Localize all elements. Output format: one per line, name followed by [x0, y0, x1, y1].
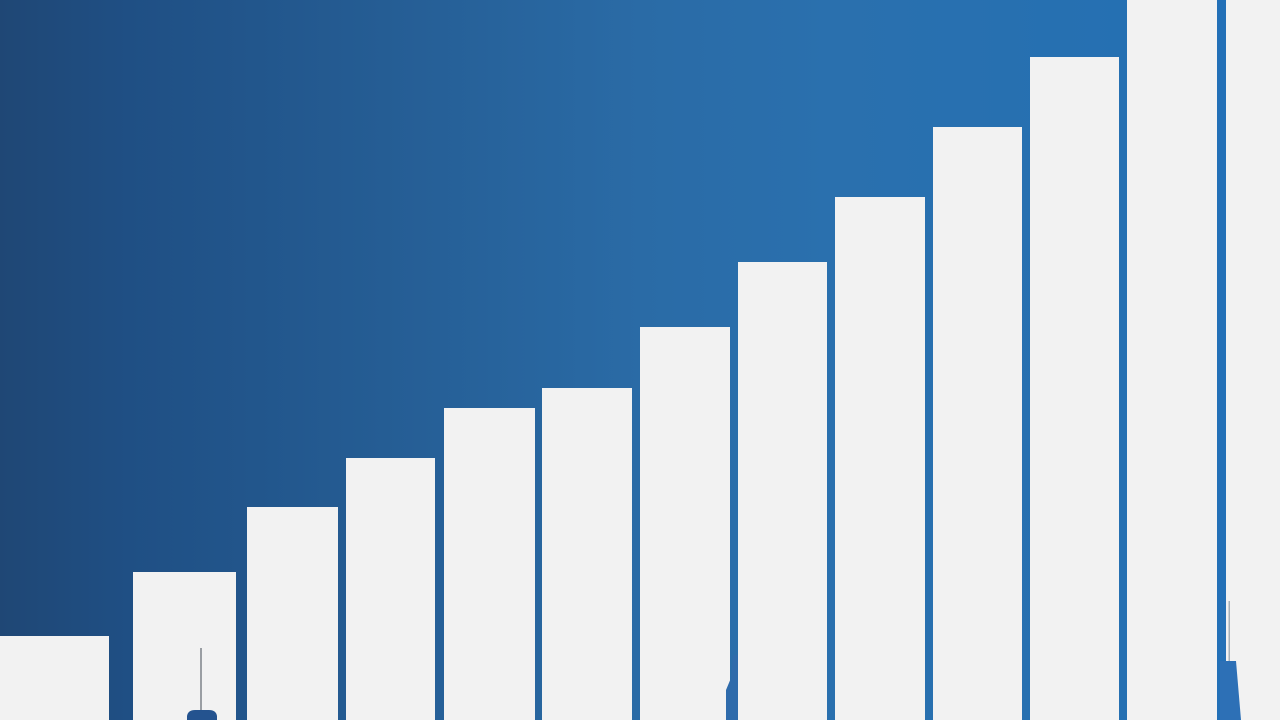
bar 10: [933, 127, 1022, 720]
icon: antenna tower on right bars: [1220, 601, 1241, 720]
bar 13: [1226, 0, 1280, 720]
bar 8: [738, 262, 827, 720]
bar 9: [835, 197, 925, 720]
bar 2: [133, 572, 236, 720]
bar 6: [542, 388, 632, 720]
bar 4: [346, 458, 435, 720]
bar 5: [444, 408, 535, 720]
bar 12: [1127, 0, 1217, 720]
bar 3: [247, 507, 338, 720]
bar 7: [640, 327, 730, 720]
bar 11: [1030, 57, 1119, 720]
icon: antenna tower on bar 2: [187, 648, 217, 720]
icon: tower spire between bars 7 and 8: [726, 655, 738, 720]
bar 1: [0, 636, 109, 720]
